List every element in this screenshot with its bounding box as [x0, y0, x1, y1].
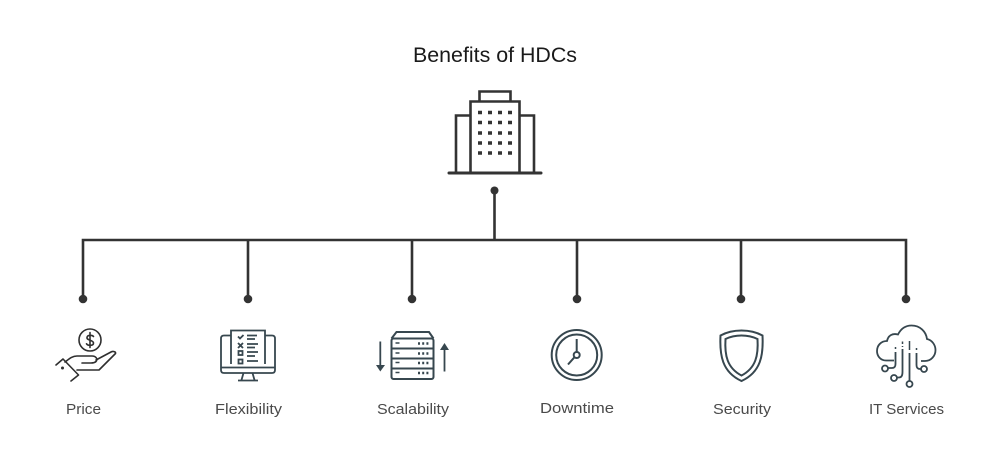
label: Security: Security: [713, 401, 772, 418]
icon: clock: [552, 330, 602, 380]
icon: server with scale arrows: [376, 332, 449, 379]
label: Flexibility: Flexibility: [215, 401, 283, 418]
label: Price: Price: [66, 401, 101, 418]
icon: hand with coin: [56, 329, 116, 381]
connector tree: [79, 186, 910, 303]
title: Benefits of HDCs: [413, 44, 577, 67]
icon: shield: [720, 330, 763, 381]
icon: monitor with checklist: [221, 330, 275, 380]
label: Downtime: Downtime: [540, 400, 614, 417]
label: Scalability: Scalability: [377, 401, 450, 418]
icon: cloud circuit: [877, 326, 936, 387]
label: IT Services: IT Services: [869, 401, 944, 418]
icon: office building: [449, 92, 541, 173]
